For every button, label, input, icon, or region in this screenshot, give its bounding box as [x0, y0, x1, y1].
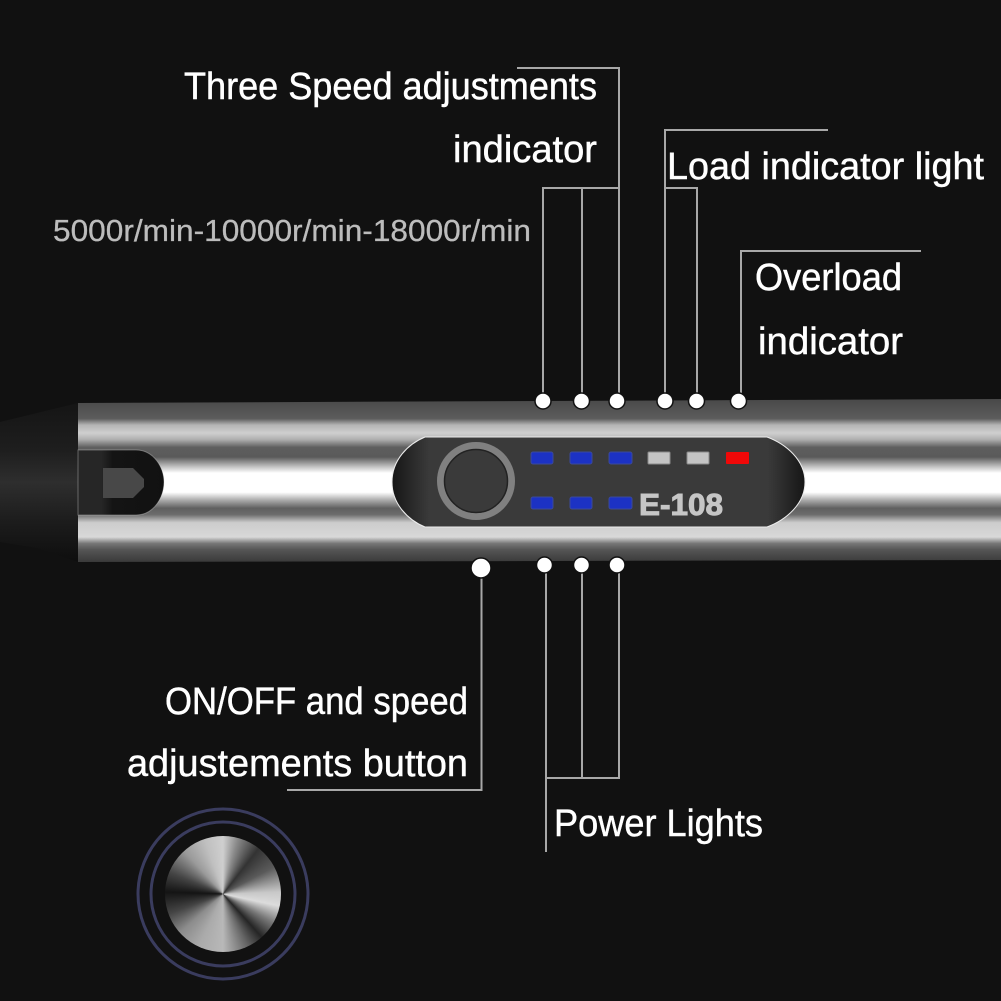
speed values: 5000r/min-10000r/min-18000r/min	[53, 213, 531, 248]
metal barrel	[78, 399, 1001, 562]
heading: three speed adjustments: Three Speed adjustments	[184, 66, 597, 108]
power lights	[531, 497, 632, 509]
control panel	[392, 437, 805, 527]
leader lines	[287, 68, 921, 852]
label: on/off and speed button: adjustements button	[127, 743, 468, 785]
label: power lights: Power Lights	[554, 803, 763, 845]
overload indicator light	[726, 452, 749, 464]
model label: E-108	[639, 487, 723, 522]
label: on/off and speed button	[127, 681, 468, 785]
label: overload indicator: Overload	[755, 257, 902, 299]
icon: metal knob	[165, 836, 281, 952]
top marker dots	[535, 393, 746, 409]
tool body	[0, 399, 1001, 562]
heading: three speed adjustments: indicator	[453, 129, 597, 171]
power button	[440, 446, 512, 516]
tapered collar	[0, 403, 78, 562]
load indicator lights	[648, 452, 709, 464]
label: overload indicator: indicator	[758, 321, 903, 363]
label: on/off and speed button: ON/OFF and speed	[165, 681, 468, 723]
heading: three speed adjustments	[184, 66, 597, 171]
bottom marker dots	[471, 557, 625, 578]
speed indicator lights	[531, 452, 632, 464]
label: overload indicator	[755, 257, 903, 363]
knob rings	[138, 809, 308, 979]
collar slot	[78, 450, 164, 515]
label: load indicator light: Load indicator light	[667, 146, 984, 188]
